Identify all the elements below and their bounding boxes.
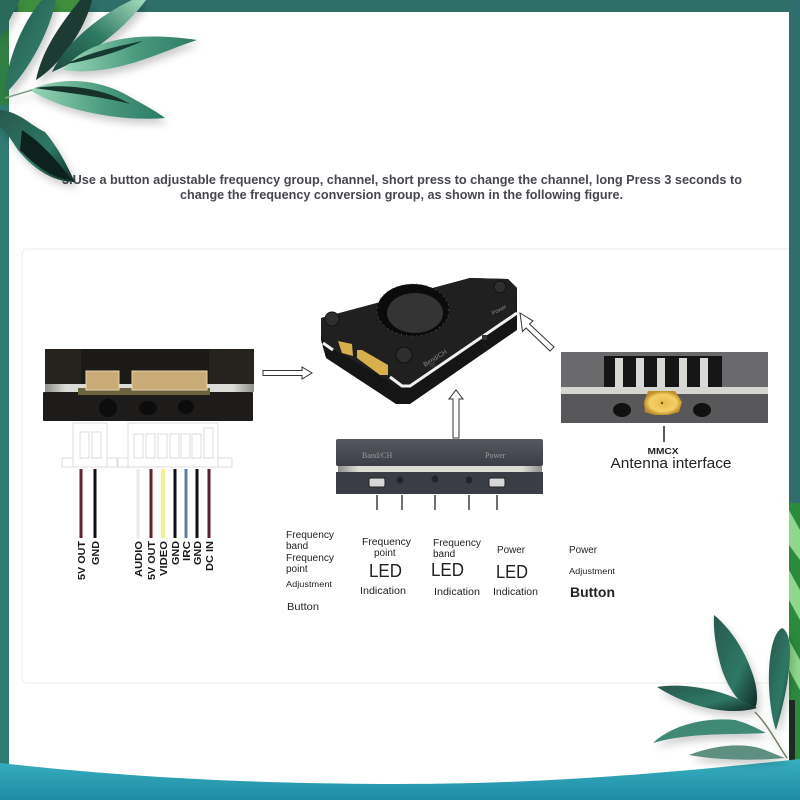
label: power adjustment button xyxy=(569,545,616,600)
label: power LED indication xyxy=(493,545,538,598)
wire labels xyxy=(76,540,216,580)
antenna label xyxy=(610,446,732,472)
frame: top band xyxy=(0,0,800,12)
label: power LED indication: LED xyxy=(496,562,528,582)
screws xyxy=(325,312,339,326)
arrow: connector side to main device xyxy=(263,367,312,379)
label: frequency band LED indication: Indication xyxy=(434,587,480,598)
label: frequency point LED indication: Indication xyxy=(360,586,406,597)
label: frequency point LED indication: point xyxy=(374,548,396,559)
panel: figure outline xyxy=(22,249,800,683)
label: frequency band LED indication xyxy=(431,538,481,598)
arrow: control panel to main device xyxy=(449,390,463,438)
label: frequency band LED indication: LED xyxy=(431,560,464,580)
pointer line to antenna xyxy=(663,426,665,442)
wire labels: 5V OUT xyxy=(146,540,158,580)
plug: two-pin connector outline xyxy=(62,423,128,467)
frame: left strip xyxy=(0,0,9,765)
MMCX gold connector xyxy=(644,391,682,415)
device: control panel view: Power xyxy=(485,451,506,460)
label: frequency band and point adjustment button: Adjustment xyxy=(286,579,333,589)
wire labels: AUDIO xyxy=(133,541,145,577)
device: main isometric view: Power xyxy=(491,304,508,317)
label: frequency band LED indication: band xyxy=(433,549,455,560)
antenna label: Antenna interface xyxy=(610,456,732,472)
wire labels: VIDEO xyxy=(158,541,170,576)
small connector xyxy=(86,371,119,390)
wires xyxy=(81,469,209,538)
label: power LED indication: Power xyxy=(497,545,526,556)
title text: 3.Use a button adjustable frequency group, channel, short press to change the channel, long Press 3 seconds to xyxy=(62,173,742,187)
device: control panel view xyxy=(336,439,543,494)
label: frequency point LED indication: Frequency xyxy=(362,537,411,548)
label: frequency point LED indication xyxy=(360,537,411,597)
wire labels: 5V OUT xyxy=(76,540,88,580)
device: main isometric view xyxy=(321,278,517,404)
label: frequency band and point adjustment button: Frequency xyxy=(286,553,334,564)
title text xyxy=(62,173,742,202)
label: power adjustment button: Button xyxy=(570,584,615,600)
plug: seven-pin connector outline xyxy=(128,423,232,467)
wire labels: GND xyxy=(90,541,102,565)
pointer lines below control panel xyxy=(377,495,497,510)
wire labels: GND xyxy=(170,541,182,565)
silver band xyxy=(323,313,517,386)
label: frequency band and point adjustment button: Frequency xyxy=(286,530,334,541)
label: frequency band and point adjustment button: band xyxy=(286,541,308,552)
label: frequency band and point adjustment button xyxy=(286,530,334,613)
label: frequency point LED indication: LED xyxy=(369,561,402,581)
frame: right strip xyxy=(789,0,800,765)
antenna label: MMCX xyxy=(648,446,679,456)
device: antenna side view xyxy=(561,352,768,423)
decoration: top-left leaves xyxy=(0,0,197,182)
decoration: bottom-right leaves xyxy=(653,615,790,760)
label: power LED indication: Indication xyxy=(493,587,538,598)
arrow: antenna side to main device xyxy=(520,313,554,351)
device: control panel view: Band/CH xyxy=(362,451,392,460)
frame: bottom teal wave xyxy=(0,759,800,800)
wire labels: DC IN xyxy=(204,541,216,571)
device: main isometric view: Band/CH xyxy=(422,349,449,369)
label: frequency band LED indication: Frequency xyxy=(433,538,481,549)
label: frequency band and point adjustment button: Button xyxy=(287,602,319,613)
device: connector side view xyxy=(43,349,254,421)
gold ports xyxy=(338,341,353,356)
fan xyxy=(377,284,449,336)
wire labels: GND xyxy=(192,541,204,565)
label: power adjustment button: Adjustment xyxy=(569,566,616,576)
wire labels: IRC xyxy=(181,541,193,561)
label: power adjustment button: Power xyxy=(569,545,598,556)
large connector xyxy=(132,371,207,390)
label: frequency band and point adjustment button: point xyxy=(286,564,308,575)
title text: change the frequency conversion group, as shown in the following figure. xyxy=(180,188,623,202)
